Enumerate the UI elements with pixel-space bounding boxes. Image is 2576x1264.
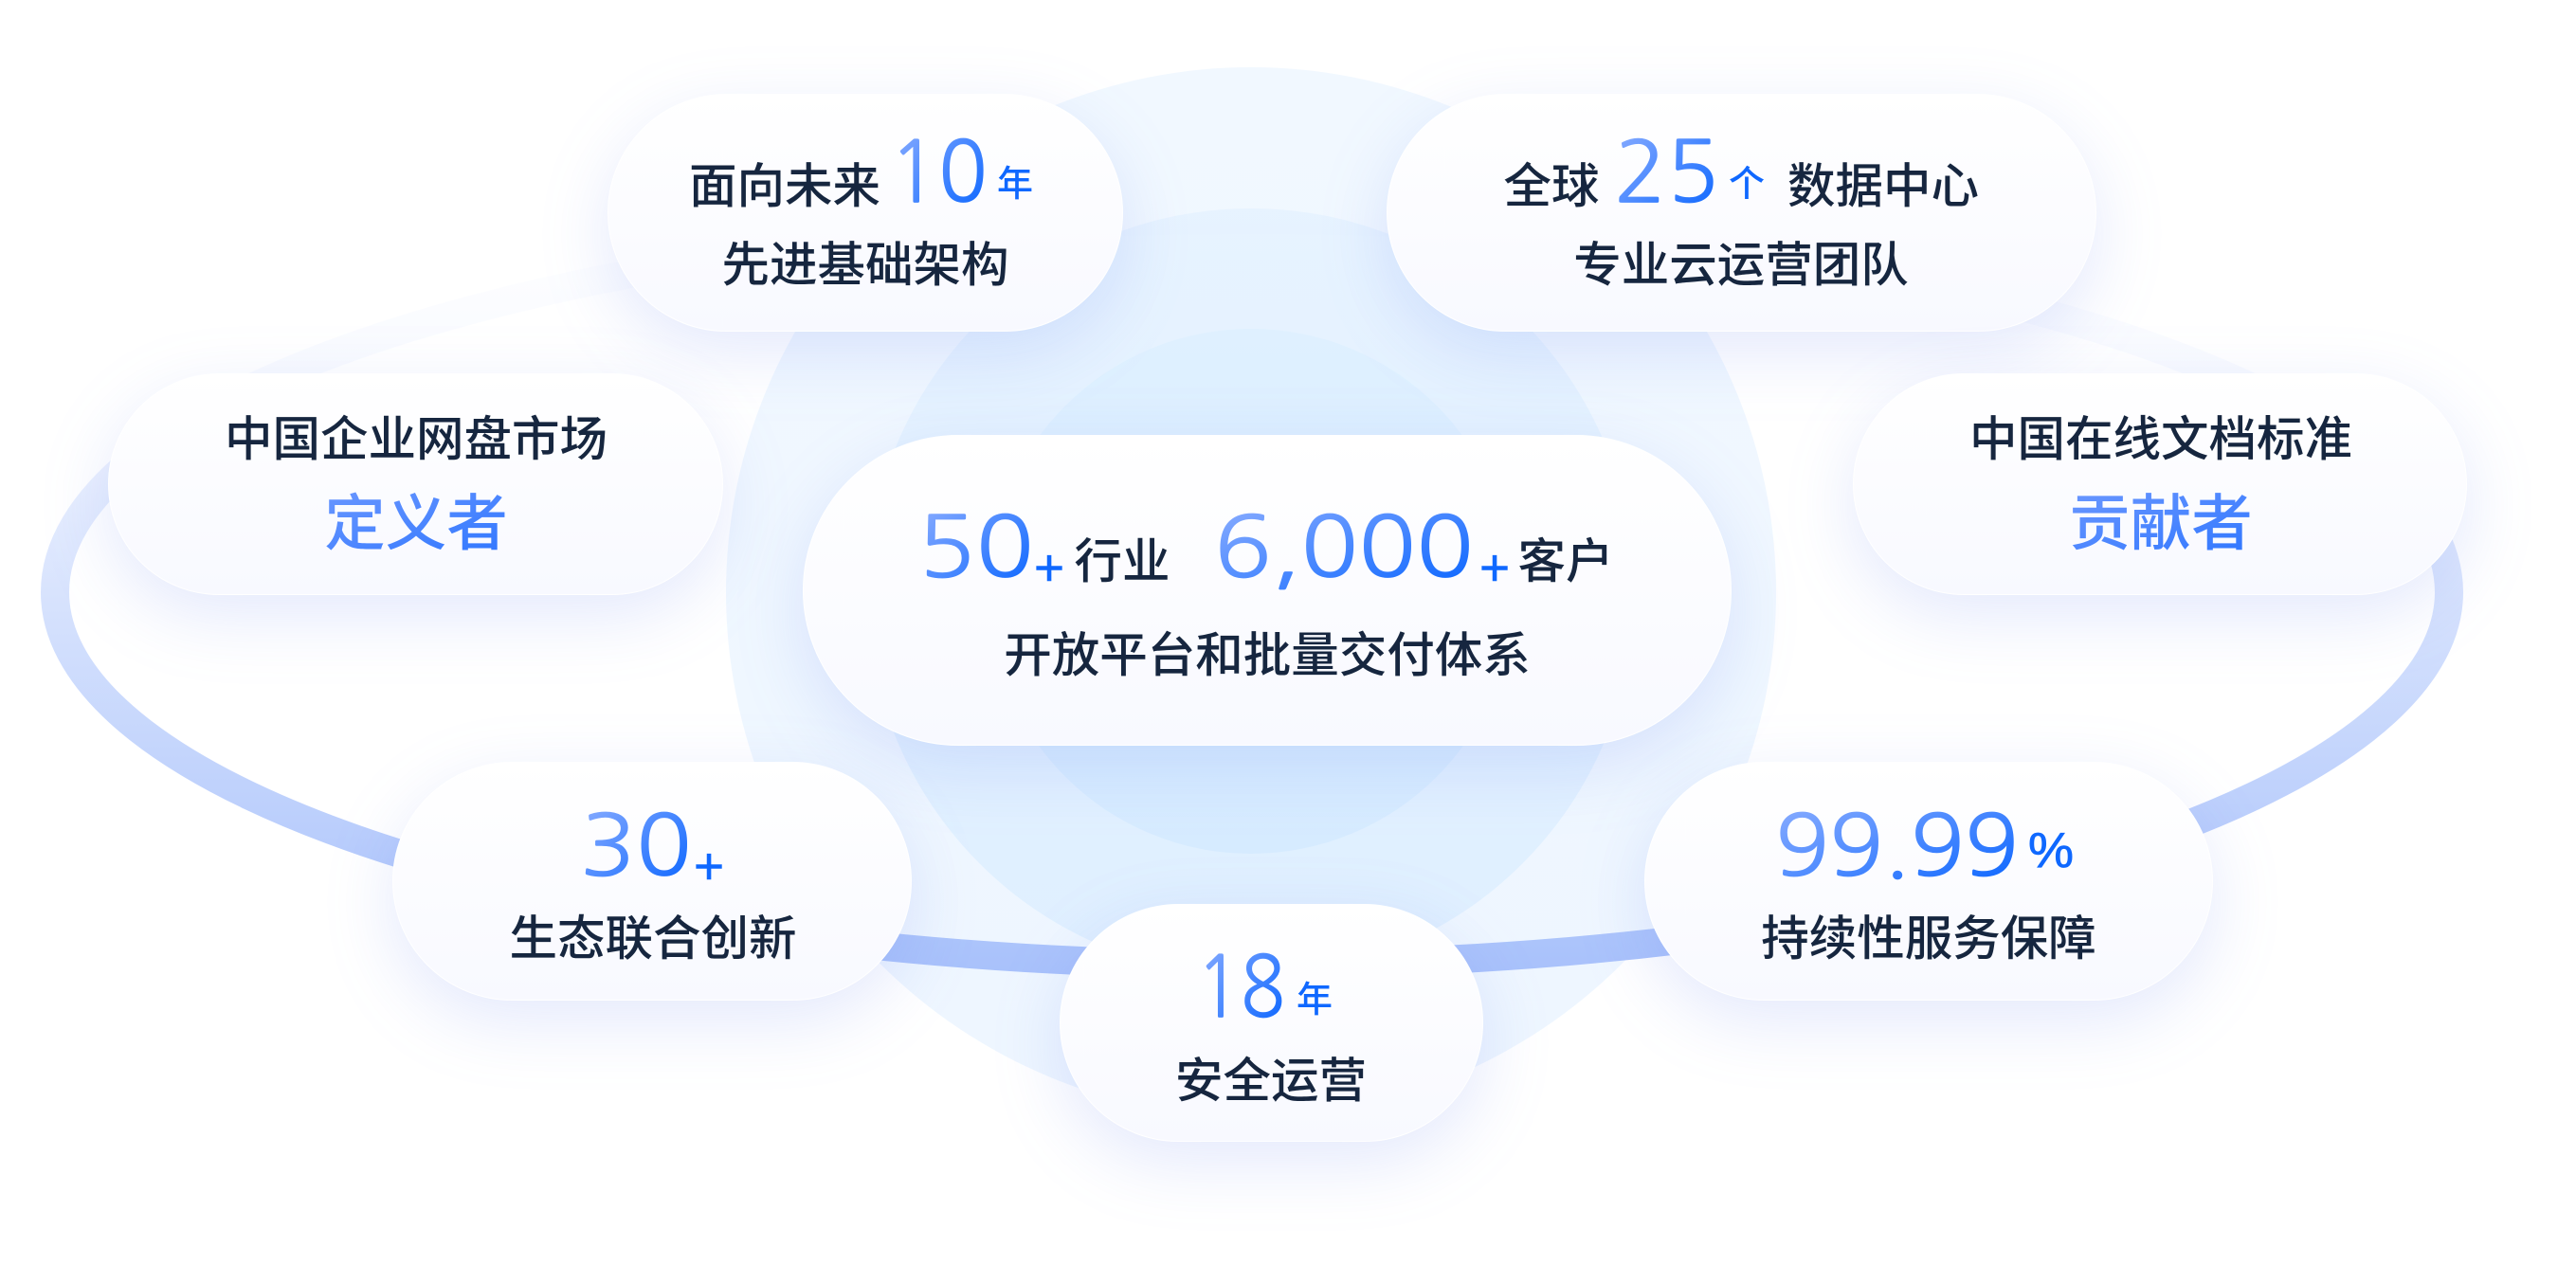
pill: 99.99% availability <box>1645 762 2212 1001</box>
pill: center platform <box>804 436 1731 745</box>
orbit ring <box>55 220 2449 965</box>
text: 先进基础架构: 先进基础架构 <box>722 238 1008 292</box>
unit: 年: 年 <box>997 165 1033 205</box>
highlight: 贡献者: 贡献者 <box>2069 490 2253 558</box>
unit: 年: 年 <box>1297 981 1333 1020</box>
text: 开放平台和批量交付体系: 开放平台和批量交付体系 <box>1004 628 1531 682</box>
text: 全球: 全球 <box>1503 159 1600 213</box>
number: 50: 50 <box>917 505 1034 589</box>
text: 中国企业网盘市场: 中国企业网盘市场 <box>225 412 608 466</box>
text: 中国在线文档标准: 中国在线文档标准 <box>1969 412 2352 466</box>
highlight: 定义者: 定义者 <box>324 490 508 558</box>
text: 持续性服务保障: 持续性服务保障 <box>1761 912 2096 966</box>
text: 专业云运营团队: 专业云运营团队 <box>1573 238 1909 292</box>
pill: market definer <box>108 373 722 595</box>
number: 10: 10 <box>889 130 988 214</box>
text: 数据中心: 数据中心 <box>1787 159 1979 213</box>
number: 99.99: 99.99 <box>1775 804 2019 888</box>
text: 客户: 客户 <box>1518 534 1613 588</box>
plus sign: + <box>694 837 724 895</box>
concentric circles <box>726 67 1776 1117</box>
pill: 10 years infrastructure <box>608 95 1122 332</box>
number: 6,000: 6,000 <box>1214 505 1474 589</box>
pill: 18 years security <box>1060 904 1482 1141</box>
text: 安全运营: 安全运营 <box>1175 1054 1367 1108</box>
percent sign: % <box>2028 823 2074 878</box>
text: 面向未来: 面向未来 <box>689 159 880 213</box>
pill: 30+ ecosystem <box>392 762 912 1001</box>
text: 行业: 行业 <box>1075 534 1170 588</box>
plus sign: + <box>1034 538 1064 597</box>
text: 生态联合创新: 生态联合创新 <box>510 912 796 966</box>
unit: 个: 个 <box>1729 165 1765 205</box>
number: 25: 25 <box>1614 130 1719 214</box>
plus sign: + <box>1479 538 1510 597</box>
number: 18: 18 <box>1196 945 1285 1029</box>
pill: standards contributor <box>1854 373 2466 595</box>
pill: 25 data centers <box>1388 95 2096 332</box>
number: 30: 30 <box>580 804 692 888</box>
